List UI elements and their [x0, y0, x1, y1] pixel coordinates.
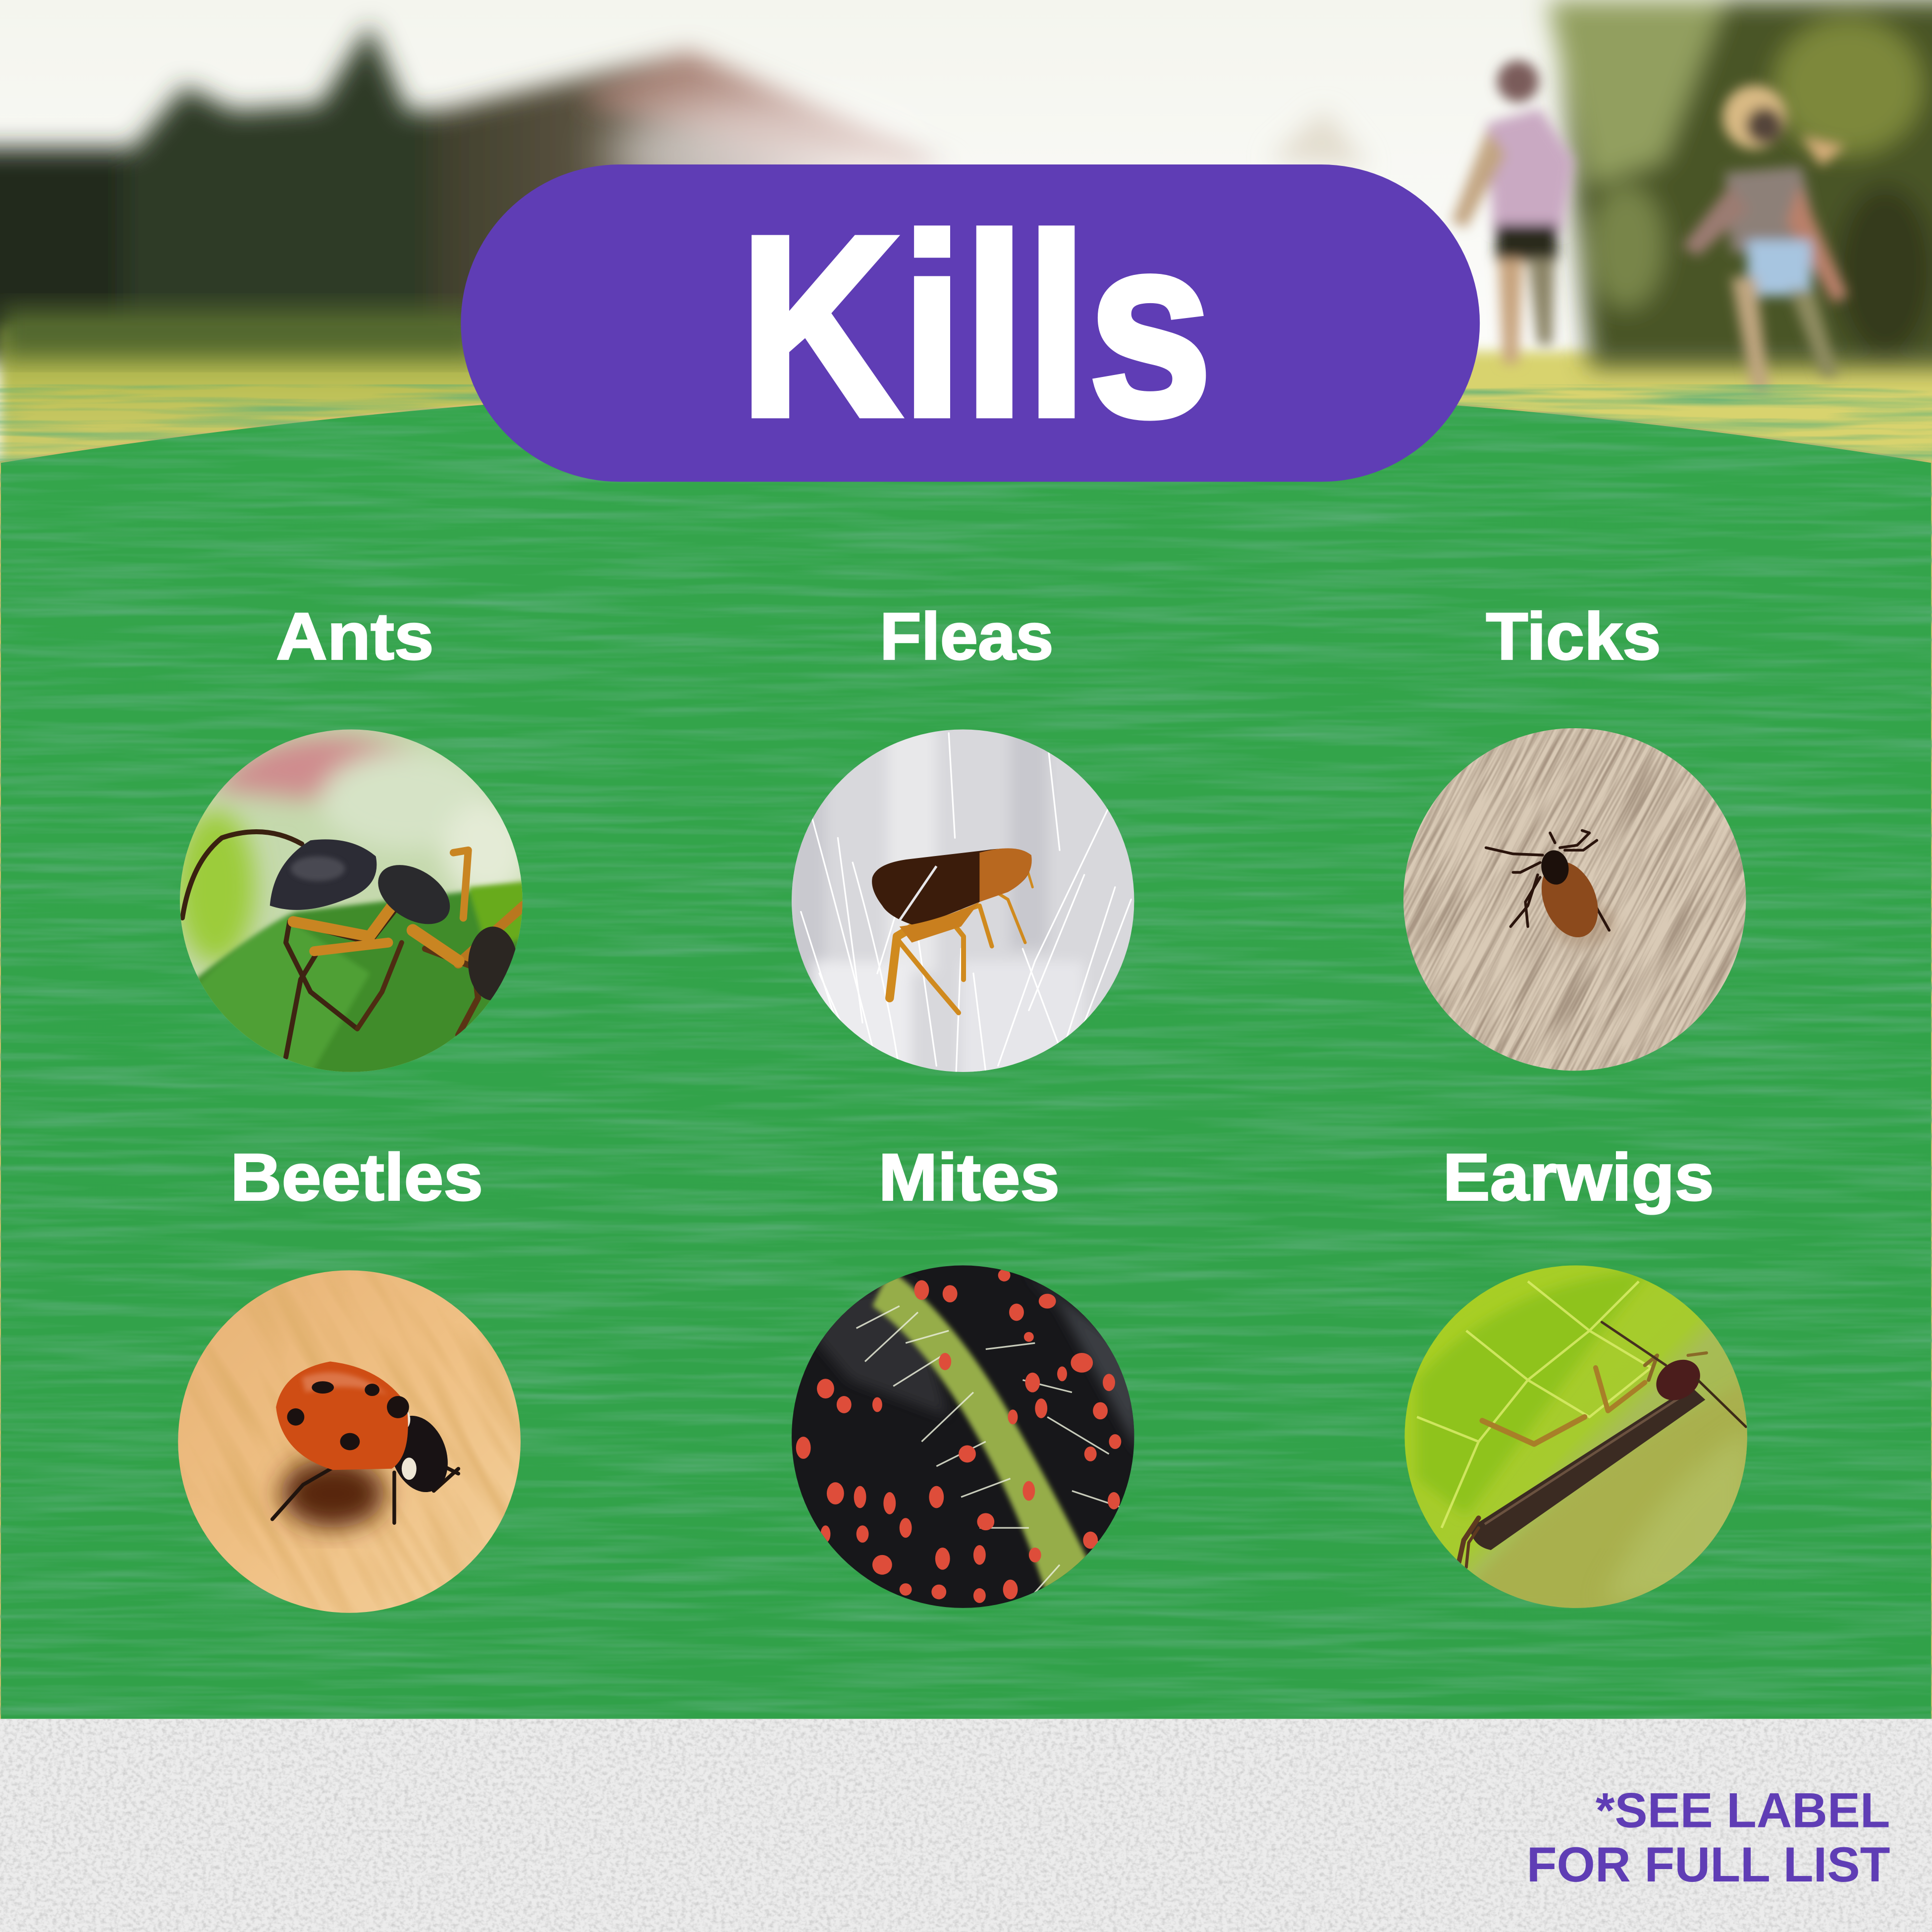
child running, blue shorts — [1682, 85, 1848, 392]
earwig — [1459, 1322, 1746, 1567]
photo circle: earwig on leaf — [1398, 1263, 1751, 1615]
photo circle: red mites on stem — [789, 1263, 1140, 1614]
photo circle: ant on leaf — [172, 721, 530, 1084]
heading: Beetles: Beetles — [230, 1140, 483, 1215]
heading: Ants: Ants — [276, 599, 434, 674]
flea — [872, 848, 1032, 1013]
photo circle: ladybug on wood — [12, 1105, 685, 1778]
child running, lilac shirt — [1451, 60, 1575, 364]
ant — [182, 832, 524, 1057]
bottom textured strip — [0, 1719, 1932, 1932]
green panel with arched top — [0, 384, 1932, 1720]
title pill — [461, 164, 1480, 482]
photo circle: tick on tan fur — [1241, 566, 1908, 1233]
footnote line 2: FOR FULL LIST — [1527, 1837, 1890, 1892]
heading: Mites: Mites — [878, 1140, 1060, 1215]
heading: Fleas: Fleas — [880, 599, 1054, 674]
tick — [1486, 830, 1609, 946]
heading: Ticks: Ticks — [1486, 599, 1661, 674]
title text: Kills — [739, 182, 1212, 470]
photo circle: flea on white fur — [789, 727, 1140, 1084]
background photo: blurred backyard with running children — [0, 0, 1932, 499]
ladybug — [272, 1361, 458, 1523]
footnote line 1: *SEE LABEL — [1596, 1783, 1890, 1838]
heading: Earwigs: Earwigs — [1443, 1140, 1714, 1215]
footnote — [1527, 1783, 1890, 1892]
